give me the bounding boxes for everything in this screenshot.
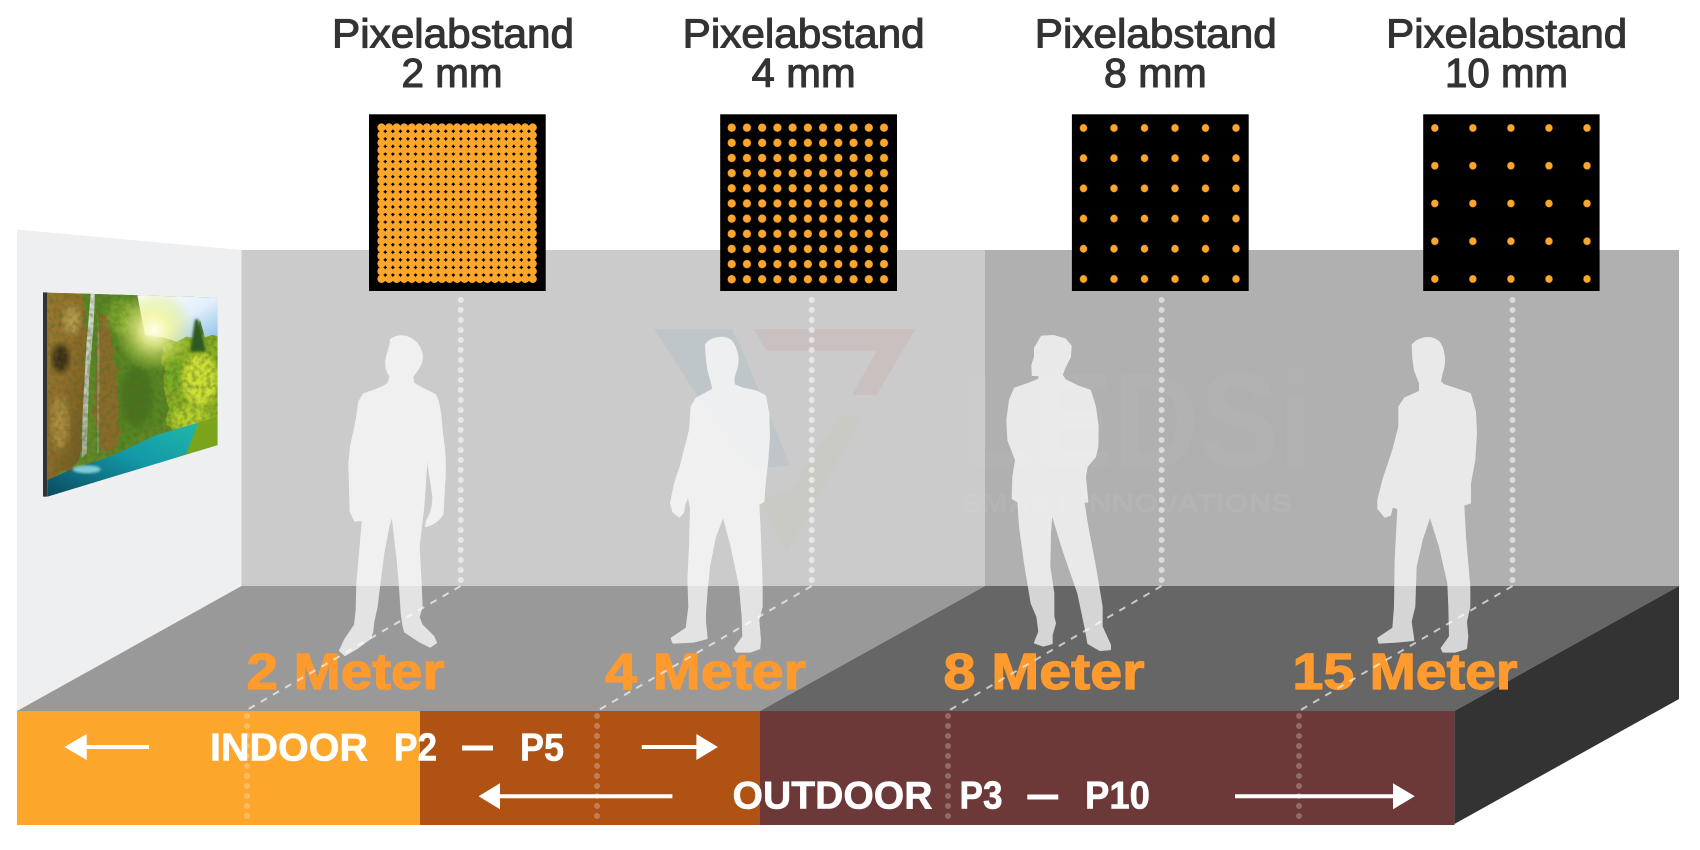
arrow: outdoor left bbox=[479, 783, 672, 809]
heading: 10 mm: Pixelabstand bbox=[1386, 10, 1627, 56]
label: 2 Meter: 2 Meter bbox=[246, 643, 445, 700]
back wall: outdoor zone bbox=[985, 250, 1679, 586]
heading: 2 mm: 2 mm bbox=[402, 50, 502, 96]
dotted distance guide lines bbox=[245, 300, 1512, 825]
wall-mounted LED screen with waterfall image bbox=[43, 292, 218, 497]
indoor range label: P2 bbox=[394, 726, 437, 770]
heading: 8 mm bbox=[1035, 10, 1277, 96]
heading: 4 mm: 4 mm bbox=[752, 50, 856, 96]
arrow: indoor right bbox=[642, 734, 718, 760]
arrow: indoor left bbox=[64, 734, 149, 760]
heading: 10 mm: 10 mm bbox=[1445, 50, 1568, 96]
pixel grid: 2 mm bbox=[369, 114, 546, 291]
arrow: outdoor right bbox=[1235, 783, 1415, 809]
heading: 4 mm: Pixelabstand bbox=[683, 10, 925, 56]
distance labels bbox=[246, 643, 1518, 700]
back wall: indoor zone bbox=[242, 250, 985, 586]
room background bbox=[17, 230, 1679, 824]
person 4 silhouette bbox=[1378, 338, 1476, 652]
band: indoor orange bbox=[17, 711, 420, 825]
indoor range label: INDOOR bbox=[210, 726, 368, 770]
person 3 silhouette bbox=[1007, 336, 1110, 650]
platform side face bbox=[1454, 586, 1679, 824]
logo watermark: LEDSi bbox=[961, 345, 1312, 496]
person 1 silhouette bbox=[340, 336, 445, 655]
indoor range label bbox=[210, 726, 564, 770]
heading: 8 mm: 8 mm bbox=[1104, 50, 1207, 96]
person 2 silhouette bbox=[671, 338, 769, 652]
indoor range label: P5 bbox=[520, 726, 564, 770]
band: outdoor maroon bbox=[760, 711, 1454, 825]
heading: 2 mm: Pixelabstand bbox=[332, 10, 574, 56]
floor: outdoor zone bbox=[760, 586, 1679, 711]
logo watermark bbox=[654, 329, 1312, 553]
band: overlap brown bbox=[420, 711, 760, 825]
heading: 4 mm bbox=[683, 10, 925, 96]
heading: 10 mm bbox=[1386, 10, 1627, 96]
outdoor range label: OUTDOOR bbox=[732, 774, 932, 818]
label: 15 Meter: 15 Meter bbox=[1292, 643, 1518, 700]
pixel grid: 10 mm bbox=[1416, 109, 1606, 298]
pixel grid: 8 mm bbox=[1068, 113, 1251, 294]
outdoor range label bbox=[732, 774, 1150, 818]
heading: 8 mm: Pixelabstand bbox=[1035, 10, 1277, 56]
outdoor range label: P10 bbox=[1085, 774, 1150, 818]
label: 8 Meter: 8 Meter bbox=[944, 643, 1145, 700]
heading: 2 mm bbox=[332, 10, 574, 96]
pixel grid: 4 mm bbox=[720, 114, 897, 291]
label: 4 Meter: 4 Meter bbox=[605, 643, 806, 700]
outdoor range label: P3 bbox=[960, 774, 1002, 818]
logo watermark: SMART INNOVATIONS bbox=[961, 488, 1292, 518]
front band: indoor / outdoor ranges bbox=[17, 711, 1454, 825]
left wall bbox=[17, 230, 242, 711]
floor: indoor zone bbox=[17, 586, 985, 711]
